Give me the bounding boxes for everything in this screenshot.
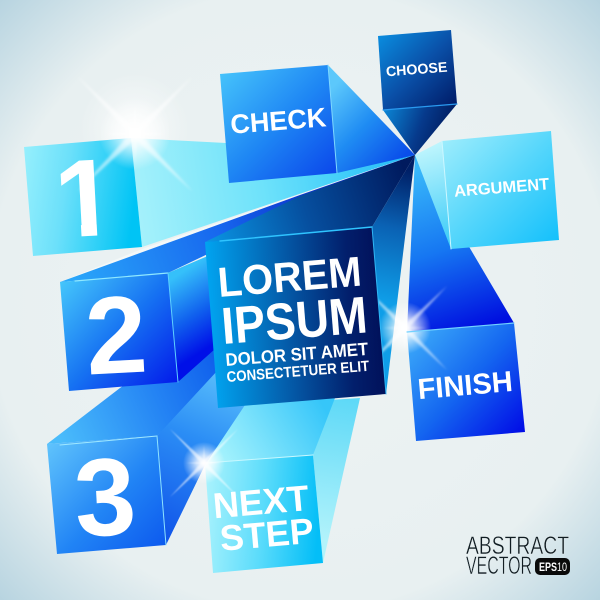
- star: cube 1: [77, 76, 193, 192]
- star: next step: [170, 429, 238, 497]
- eps text: EPS10: [539, 562, 567, 574]
- main subtitle: DOLOR SIT AMET: [225, 339, 369, 370]
- main title: LOREM: [216, 248, 363, 306]
- choose cube: [378, 30, 457, 155]
- vector text: VECTOR: [466, 552, 532, 580]
- abstract vector label: [466, 532, 570, 580]
- cube 2: [60, 155, 415, 399]
- main cube back faces: [205, 155, 415, 394]
- cube 3: [47, 320, 245, 561]
- check side: [328, 65, 415, 173]
- argument cube: [415, 131, 559, 249]
- argument front: [442, 131, 559, 249]
- main top: [205, 155, 415, 242]
- main front: [205, 227, 386, 408]
- main title: [216, 248, 369, 356]
- finish cube: [407, 155, 525, 441]
- main subtitle: [225, 339, 370, 386]
- check cube: [220, 65, 415, 183]
- cube 2 front: [60, 273, 178, 391]
- cube 3 front: [47, 436, 166, 554]
- finish label: FINISH: [416, 366, 514, 406]
- main cube front: [205, 227, 386, 408]
- next step front: [205, 455, 323, 573]
- next step label: STEP: [218, 510, 315, 559]
- choose front: [378, 30, 457, 110]
- cube 2 side: [168, 255, 215, 382]
- cube 3 top: [47, 320, 225, 444]
- abstract text: ABSTRACT: [466, 532, 569, 560]
- next step side: [313, 398, 360, 563]
- edge highlights: [60, 65, 514, 545]
- check front: [220, 65, 337, 183]
- eps badge: [535, 558, 570, 575]
- cube 1 front: [24, 138, 142, 256]
- argument label: ARGUMENT: [453, 175, 550, 201]
- check label: CHECK: [229, 102, 328, 140]
- cube 1: [24, 136, 415, 262]
- main subtitle: CONSECTETUER ELIT: [226, 358, 370, 386]
- number 1: 1: [51, 136, 119, 262]
- main title: IPSUM: [219, 286, 369, 356]
- number 2: 2: [82, 273, 150, 399]
- star: finish: [363, 286, 447, 370]
- gap highlight: [60, 155, 415, 282]
- choose label: CHOOSE: [385, 60, 448, 80]
- finish front: [407, 323, 525, 441]
- number 3: 3: [71, 435, 139, 561]
- cube 3 side: [157, 370, 245, 545]
- argument side: [415, 141, 451, 249]
- cube 1 side: [131, 138, 415, 247]
- next step label: NEXT: [211, 477, 310, 526]
- star: cube 1 haze: [80, 73, 190, 183]
- main side: [372, 155, 415, 394]
- next step top: [205, 398, 335, 463]
- choose underside: [383, 104, 457, 155]
- cube 2 top: [60, 155, 415, 282]
- next step cube: [205, 398, 360, 573]
- finish top: [407, 155, 514, 332]
